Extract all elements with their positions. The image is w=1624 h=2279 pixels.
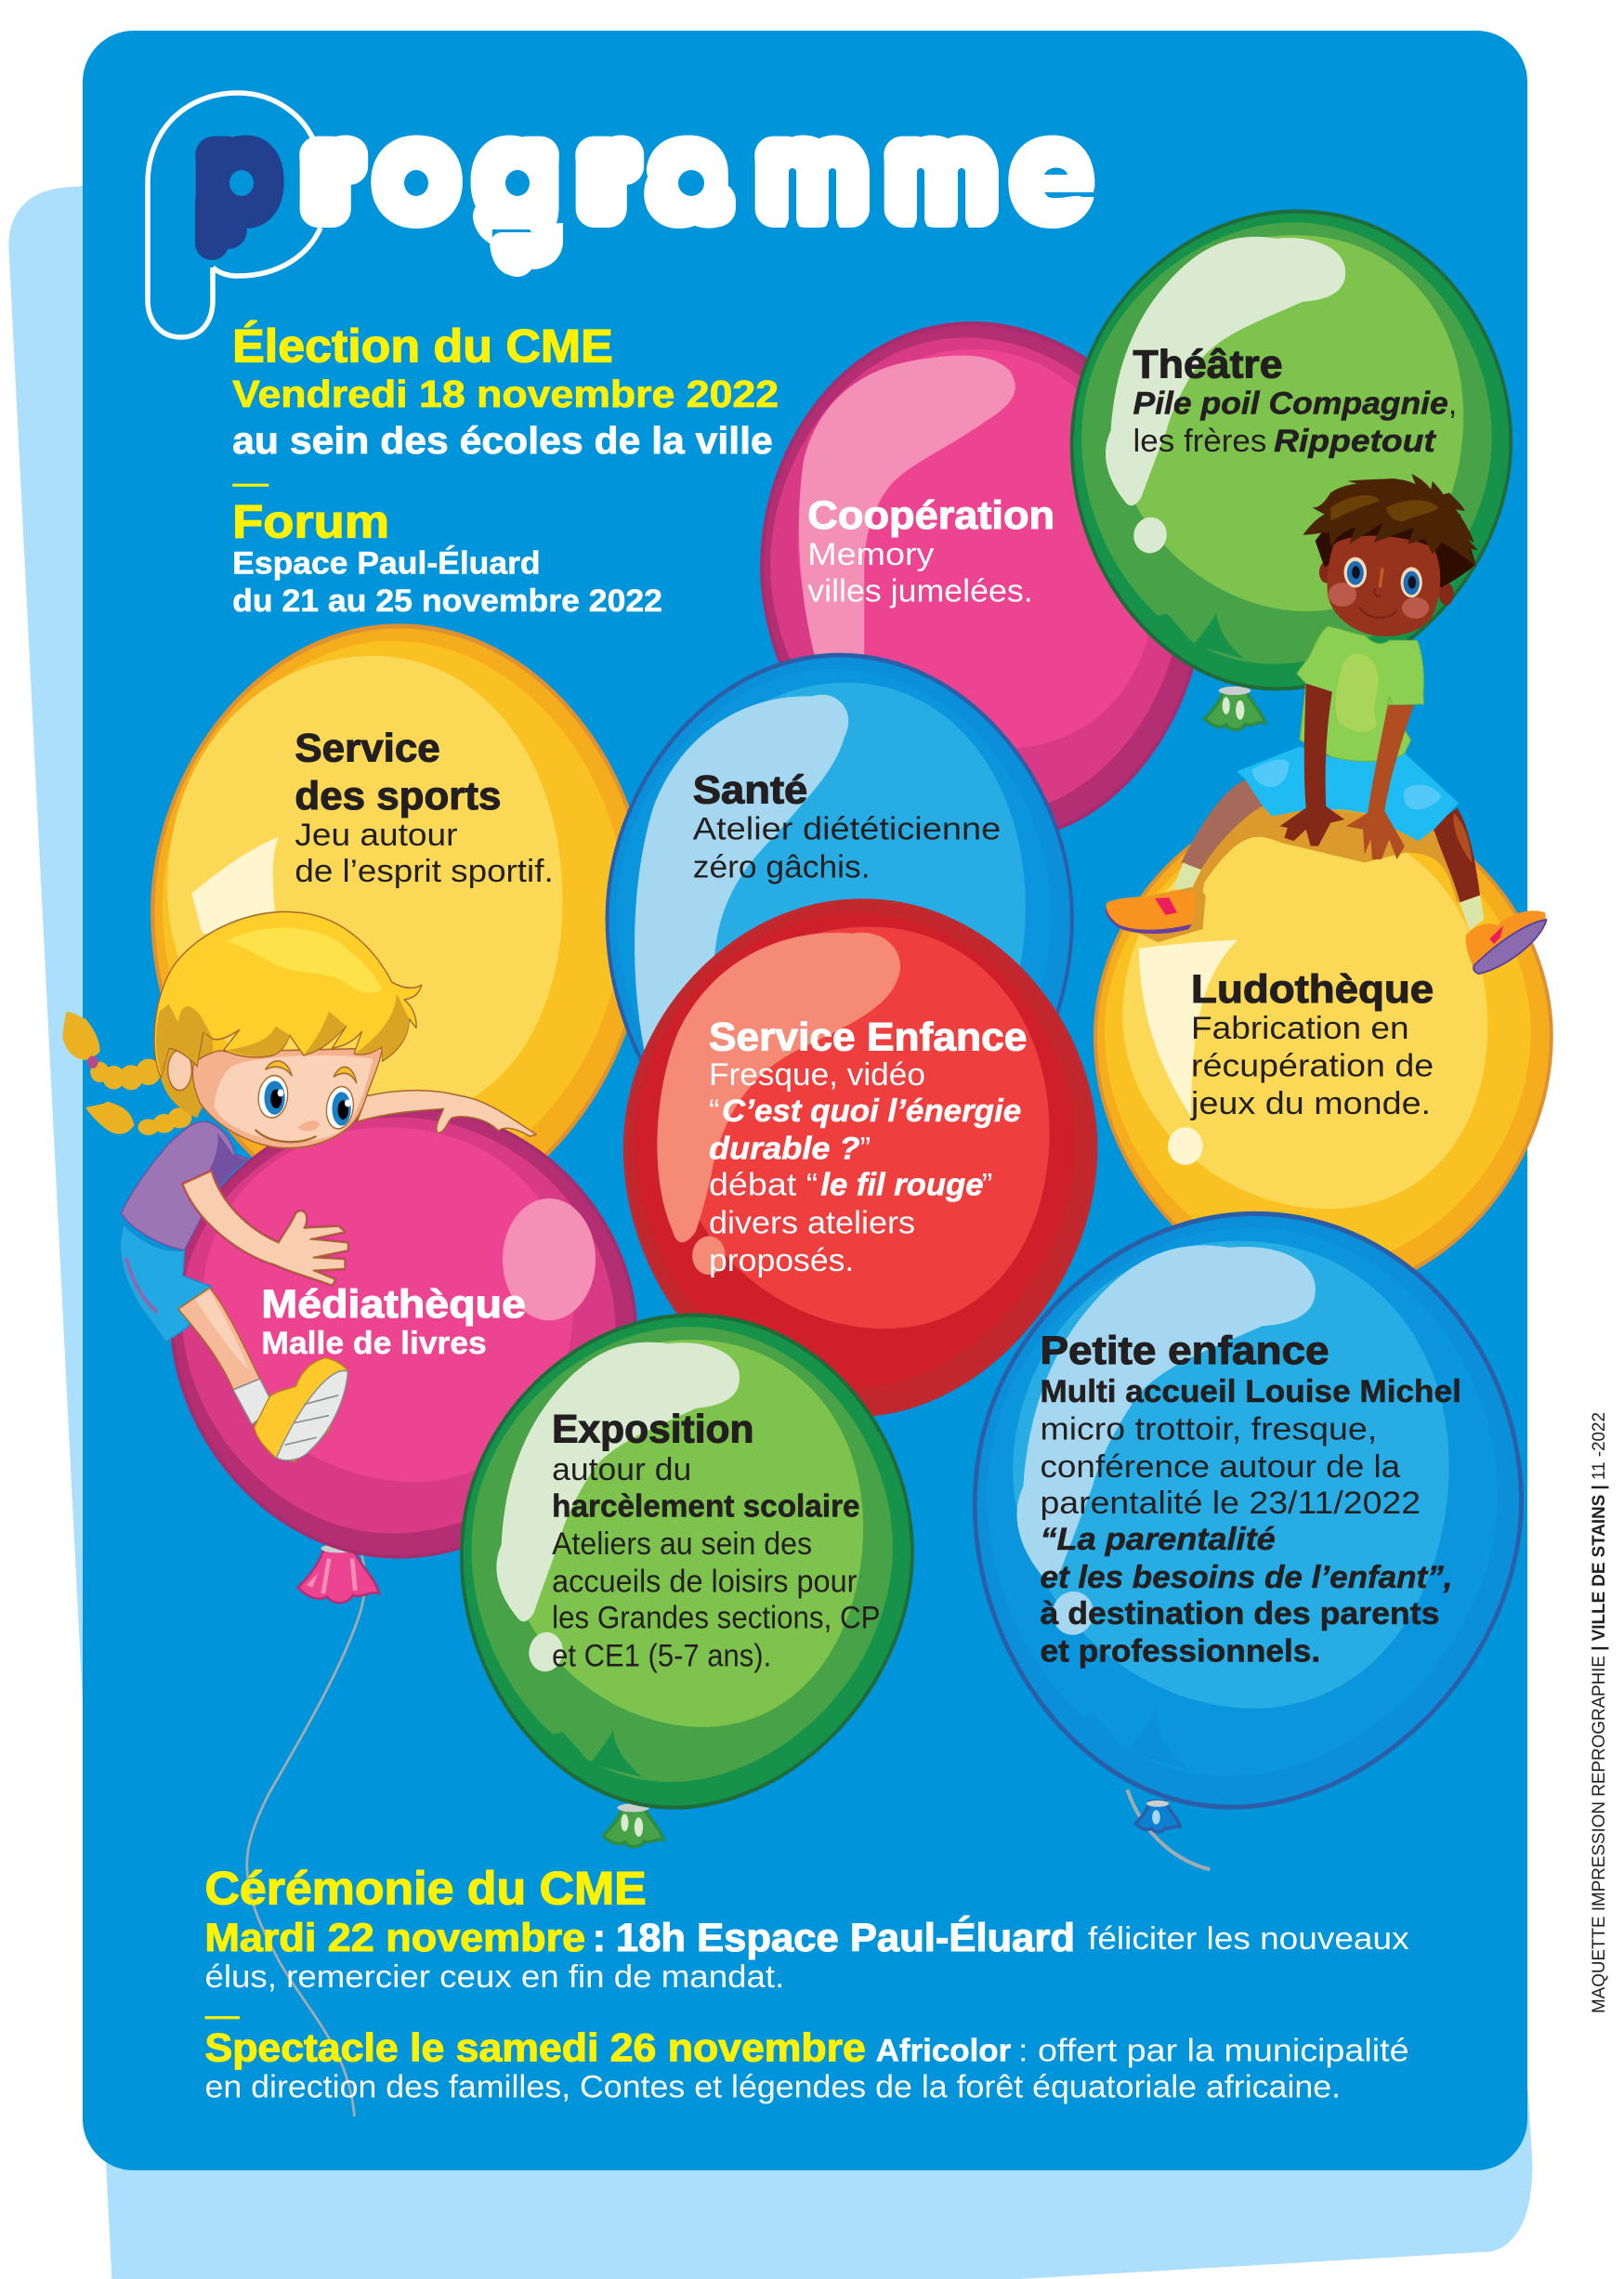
text block: cérémonie du CME: :: [593, 1916, 606, 1959]
girl: shirt: [121, 1121, 247, 1251]
text: santé: [693, 768, 1001, 884]
balloon: blue petite enfance: [925, 1170, 1567, 1852]
text: théâtre: ,: [1448, 386, 1457, 422]
text: santé: Atelier diététicienne: [693, 812, 1001, 847]
title: Programme: [148, 93, 1104, 337]
girl: shorts: [120, 1225, 212, 1342]
balloon: pink coopération: [723, 288, 1247, 874]
text: exposition: [552, 1408, 880, 1673]
text: médiathèque: Médiathèque: [261, 1282, 526, 1326]
girl: back hair: [155, 1012, 213, 1118]
text: exposition: autour du: [552, 1452, 691, 1487]
text: médiathèque: [261, 1282, 526, 1361]
text: service des sports: des sports: [295, 774, 501, 818]
text: ludothèque: [1190, 967, 1434, 1121]
girl: hair highlight: [226, 928, 383, 993]
text: ludothèque: Ludothèque: [1191, 967, 1434, 1011]
text: petite enfance: à destination des parents: [1040, 1596, 1439, 1631]
text: petite enfance: micro trottoir, fresque,: [1040, 1411, 1377, 1447]
girl: arm shadow on balloon: [183, 1172, 347, 1285]
boy: hair: [1303, 474, 1478, 568]
text: petite enfance: [1040, 1329, 1461, 1670]
title: Programme: p: [207, 117, 269, 231]
boy: face: [1327, 536, 1440, 636]
text: service enfance: débat “: [709, 1168, 818, 1203]
text: service enfance: C’est quoi l’énergie: [722, 1094, 1021, 1129]
text: exposition: harcèlement scolaire: [552, 1488, 860, 1524]
text: médiathèque: Malle de livres: [261, 1326, 487, 1361]
text: service enfance: proposés.: [709, 1243, 854, 1278]
girl: eyebrows: [266, 1061, 292, 1076]
balloon: green exposition: [425, 1282, 947, 1847]
text: petite enfance: et les besoins de l’enfant”,: [1040, 1560, 1453, 1595]
boy: nose and mouth: [1359, 568, 1397, 618]
text: ludothèque: Fabrication en: [1191, 1011, 1409, 1046]
text: coopération: [807, 493, 1054, 609]
text block: Élection du CME: du 21 au 25 novembre 2022: [232, 583, 662, 619]
girl: second arm and hand: [357, 1091, 536, 1136]
text: service enfance: Fresque, vidéo: [709, 1057, 925, 1093]
boy: shorts highlights: [1252, 760, 1289, 787]
girl: shoe: [255, 1357, 347, 1461]
text: exposition: accueils de loisirs pour: [552, 1565, 857, 1600]
character: boy sitting on balloon: [1106, 474, 1547, 974]
text: service enfance: ”: [860, 1132, 871, 1167]
text: théâtre: les frères: [1133, 424, 1266, 459]
girl: leg: [178, 1288, 260, 1390]
text: santé: zéro gâchis.: [693, 849, 871, 884]
balloon: pink médiathèque: [138, 1073, 667, 1603]
text: service enfance: divers ateliers: [709, 1205, 915, 1240]
text block: Élection du CME: Vendredi 18 novembre 2022: [232, 373, 779, 415]
girl: braids: [62, 1012, 191, 1135]
boy: eyes: [1344, 557, 1422, 597]
text block: cérémonie du CME: élus, remercier ceux en fin de mandat.: [204, 1959, 784, 1995]
text: petite enfance: Petite enfance: [1040, 1329, 1329, 1372]
balloon: blue santé: [608, 655, 1072, 1204]
text: théâtre: Rippetout: [1274, 424, 1436, 459]
boy: second sock: [1460, 896, 1485, 931]
text: théâtre: [1133, 343, 1457, 459]
boy: right leg: [1433, 808, 1480, 902]
text block: spectacle: : offert par la municipalité: [1018, 2034, 1409, 2069]
boy: shorts highlight right: [1404, 785, 1442, 809]
boy: left arm: [1279, 684, 1344, 846]
girl: sock: [233, 1379, 269, 1424]
text: exposition: et CE1 (5-7 ans).: [552, 1638, 771, 1673]
boy: right arm: [1346, 705, 1414, 859]
text: service des sports: [295, 726, 554, 889]
text: service enfance: durable ?: [709, 1132, 860, 1167]
text: coopération: Memory: [807, 537, 935, 572]
text: service des sports: Jeu autour: [295, 818, 458, 853]
boy: cheeks: [1329, 583, 1429, 619]
text block: spectacle: Spectacle le samedi 26 novembre: [204, 2026, 866, 2070]
text block: Élection du CME: [232, 320, 779, 619]
balloon: yellow service des sports: [152, 626, 647, 1222]
girl: eyes: [255, 1072, 357, 1132]
boy: right shoe: [1465, 910, 1547, 974]
text: coopération: Coopération: [807, 493, 1054, 537]
boy: shadow on balloon: [1183, 808, 1479, 902]
text block: cérémonie du CME: 18h Espace Paul-Éluard: [616, 1916, 1075, 1959]
balloon: red service enfance: [611, 888, 1108, 1427]
balloon strings: [247, 1554, 1210, 2116]
text: santé: Santé: [693, 768, 807, 812]
text: exposition: Ateliers au sein des: [552, 1526, 812, 1562]
text: petite enfance: parentalité le 23/11/2022: [1040, 1486, 1421, 1521]
text block: cérémonie du CME: [204, 1863, 1409, 1995]
text block: Élection du CME: Espace Paul-Éluard: [232, 544, 541, 582]
text: service des sports: de l’esprit sportif.: [295, 854, 554, 889]
text: service enfance: [709, 1015, 1027, 1278]
credit: vertical print line: MAQUETTE IMPRESSION REPROGRAPHIE | VILLE DE STAINS | 11 -2022: [1590, 1412, 1609, 2013]
character: girl hugging balloon: [62, 911, 536, 1461]
text: service enfance: ”: [982, 1168, 992, 1203]
text: service enfance: Service Enfance: [709, 1015, 1027, 1058]
boy: ears: [1319, 562, 1454, 605]
text: petite enfance: Multi accueil Louise Michel: [1040, 1374, 1461, 1409]
text block: spectacle: [204, 2016, 1409, 2105]
text: ludothèque: jeux du monde.: [1190, 1086, 1431, 1121]
text block: spectacle: en direction des familles, Contes et légendes de la forêt équatoriale africaine.: [204, 2070, 1341, 2105]
text: petite enfance: “La parentalité: [1040, 1522, 1276, 1557]
girl: shoe sole lines: [285, 1395, 338, 1445]
text: théâtre: Pile poil Compagnie: [1133, 386, 1448, 422]
boy: back hair: [1316, 504, 1475, 587]
girl: ear: [168, 1050, 191, 1091]
text: ludothèque: récupération de: [1191, 1049, 1434, 1084]
text block: Élection du CME: Élection du CME: [232, 320, 613, 372]
boy: shirt highlight: [1336, 653, 1379, 732]
boy: shirt: [1297, 626, 1423, 761]
balloon: green théâtre: [1032, 177, 1548, 730]
text block: cérémonie du CME: Mardi 22 novembre: [204, 1916, 585, 1959]
boy: socks: [1173, 863, 1201, 894]
text block: Élection du CME: Forum: [232, 495, 389, 547]
boy: left shoe: [1106, 886, 1206, 942]
girl: nose and mouth: [255, 1120, 320, 1142]
text: service enfance: le fil rouge: [820, 1168, 983, 1203]
text block: Élection du CME: au sein des écoles de la ville: [232, 419, 773, 462]
text: coopération: villes jumelées.: [807, 573, 1033, 609]
balloon: yellow ludothèque: [1095, 799, 1552, 1293]
text: service enfance: “: [709, 1094, 719, 1129]
text: théâtre: Théâtre: [1133, 343, 1283, 386]
girl: shorts stripe: [126, 1258, 158, 1313]
text block: spectacle: Africolor: [876, 2034, 1011, 2069]
text block: cérémonie du CME: féliciter les nouveaux: [1088, 1921, 1409, 1957]
text block: cérémonie du CME: Cérémonie du CME: [204, 1863, 647, 1915]
text: service des sports: Service: [295, 726, 440, 769]
boy: left leg: [1181, 778, 1264, 870]
girl: hair: [154, 911, 422, 1078]
text: petite enfance: conférence autour de la: [1040, 1449, 1401, 1485]
boy: hair highlights: [1330, 495, 1438, 521]
text: exposition: Exposition: [552, 1408, 753, 1451]
text: petite enfance: et professionnels.: [1040, 1634, 1320, 1670]
boy: shorts: [1237, 747, 1459, 841]
girl: second eyebrow: [334, 1067, 357, 1083]
girl: hair shading: [156, 993, 409, 1076]
girl: face: [192, 1048, 383, 1148]
title: Programme: rogramme: [311, 117, 1080, 231]
text: exposition: les Grandes sections, CP: [552, 1601, 880, 1636]
girl: front arm and hand: [183, 1172, 347, 1285]
